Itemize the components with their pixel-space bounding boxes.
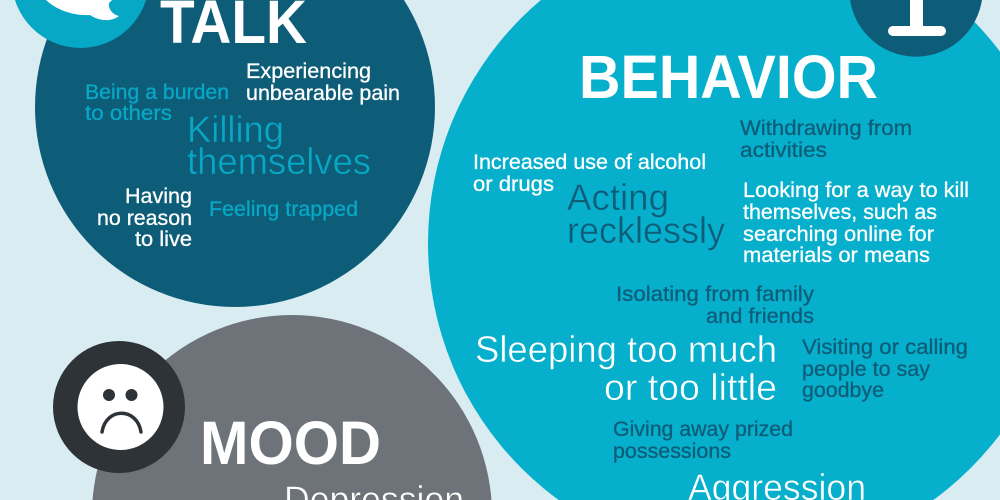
text: having no reason to live: Having (125, 184, 192, 208)
text: experiencing unbearable pain: Experiencing (246, 59, 371, 83)
text: acting recklessly (567, 176, 725, 251)
text: having no reason to live (97, 184, 192, 251)
text: having no reason to live: to live (135, 227, 192, 251)
text: isolating from family and friends: and friends (706, 304, 814, 328)
icon: speech bubble (12, 0, 149, 48)
icon: sad face (53, 341, 185, 473)
text: giving away prized possessions (613, 417, 793, 463)
text: sleeping too much or too little: Sleeping too much (475, 328, 777, 370)
text: increased use of alcohol or drugs: Increased use of alcohol (473, 150, 706, 174)
text: looking for a way to kill themselves (743, 178, 969, 267)
text: looking for a way to kill themselves: searching online for (743, 222, 934, 246)
text: having no reason to live: no reason (97, 206, 192, 230)
icon: behavior symbol (849, 0, 983, 57)
heading: behavior: BEHAVIOR (579, 43, 878, 111)
text: being a burden to others: to others (85, 101, 172, 125)
mood circle (92, 315, 492, 500)
text: giving away prized possessions: possessions (613, 439, 731, 463)
text: killing themselves (187, 108, 371, 182)
text: acting recklessly: recklessly (567, 209, 725, 251)
text: experiencing unbearable pain: unbearable pain (246, 81, 400, 105)
text: isolating from family and friends (616, 282, 814, 328)
heading: mood: MOOD (200, 409, 381, 477)
text: killing themselves: themselves (187, 140, 371, 182)
text: experiencing unbearable pain (246, 59, 400, 105)
text: looking for a way to kill themselves: themselves, such as (743, 200, 937, 224)
text: withdrawing from activities: Withdrawing from (740, 116, 912, 140)
text: visiting or calling people to say goodbye: Visiting or calling (802, 335, 968, 359)
text: withdrawing from activities: activities (740, 138, 827, 162)
panel: mood (53, 315, 492, 500)
text: withdrawing from activities (740, 116, 912, 162)
text: visiting or calling people to say goodbye: people to say (802, 357, 930, 381)
text: visiting or calling people to say goodbye: goodbye (802, 378, 884, 402)
text: visiting or calling people to say goodbye (802, 335, 968, 402)
text: feeling trapped: Feeling trapped (209, 197, 358, 221)
text: being a burden to others (85, 80, 229, 125)
text: sleeping too much or too little (475, 328, 777, 408)
text: looking for a way to kill themselves: Looking for a way to kill (743, 178, 969, 202)
text: looking for a way to kill themselves: materials or means (743, 243, 930, 267)
text: giving away prized possessions: Giving away prized (613, 417, 793, 441)
text: sleeping too much or too little: or too little (604, 366, 777, 408)
text: acting recklessly: Acting (567, 176, 669, 218)
text: increased use of alcohol or drugs: or drugs (473, 172, 554, 196)
text: increased use of alcohol or drugs (473, 150, 706, 196)
text: killing themselves: Killing (187, 108, 284, 150)
panel: behavior (428, 0, 1000, 500)
talk circle (35, 0, 435, 307)
behavior circle (428, 0, 1000, 500)
panel: talk (12, 0, 435, 307)
text: isolating from family and friends: Isolating from family (616, 282, 814, 306)
text: being a burden to others: Being a burden (85, 80, 229, 104)
